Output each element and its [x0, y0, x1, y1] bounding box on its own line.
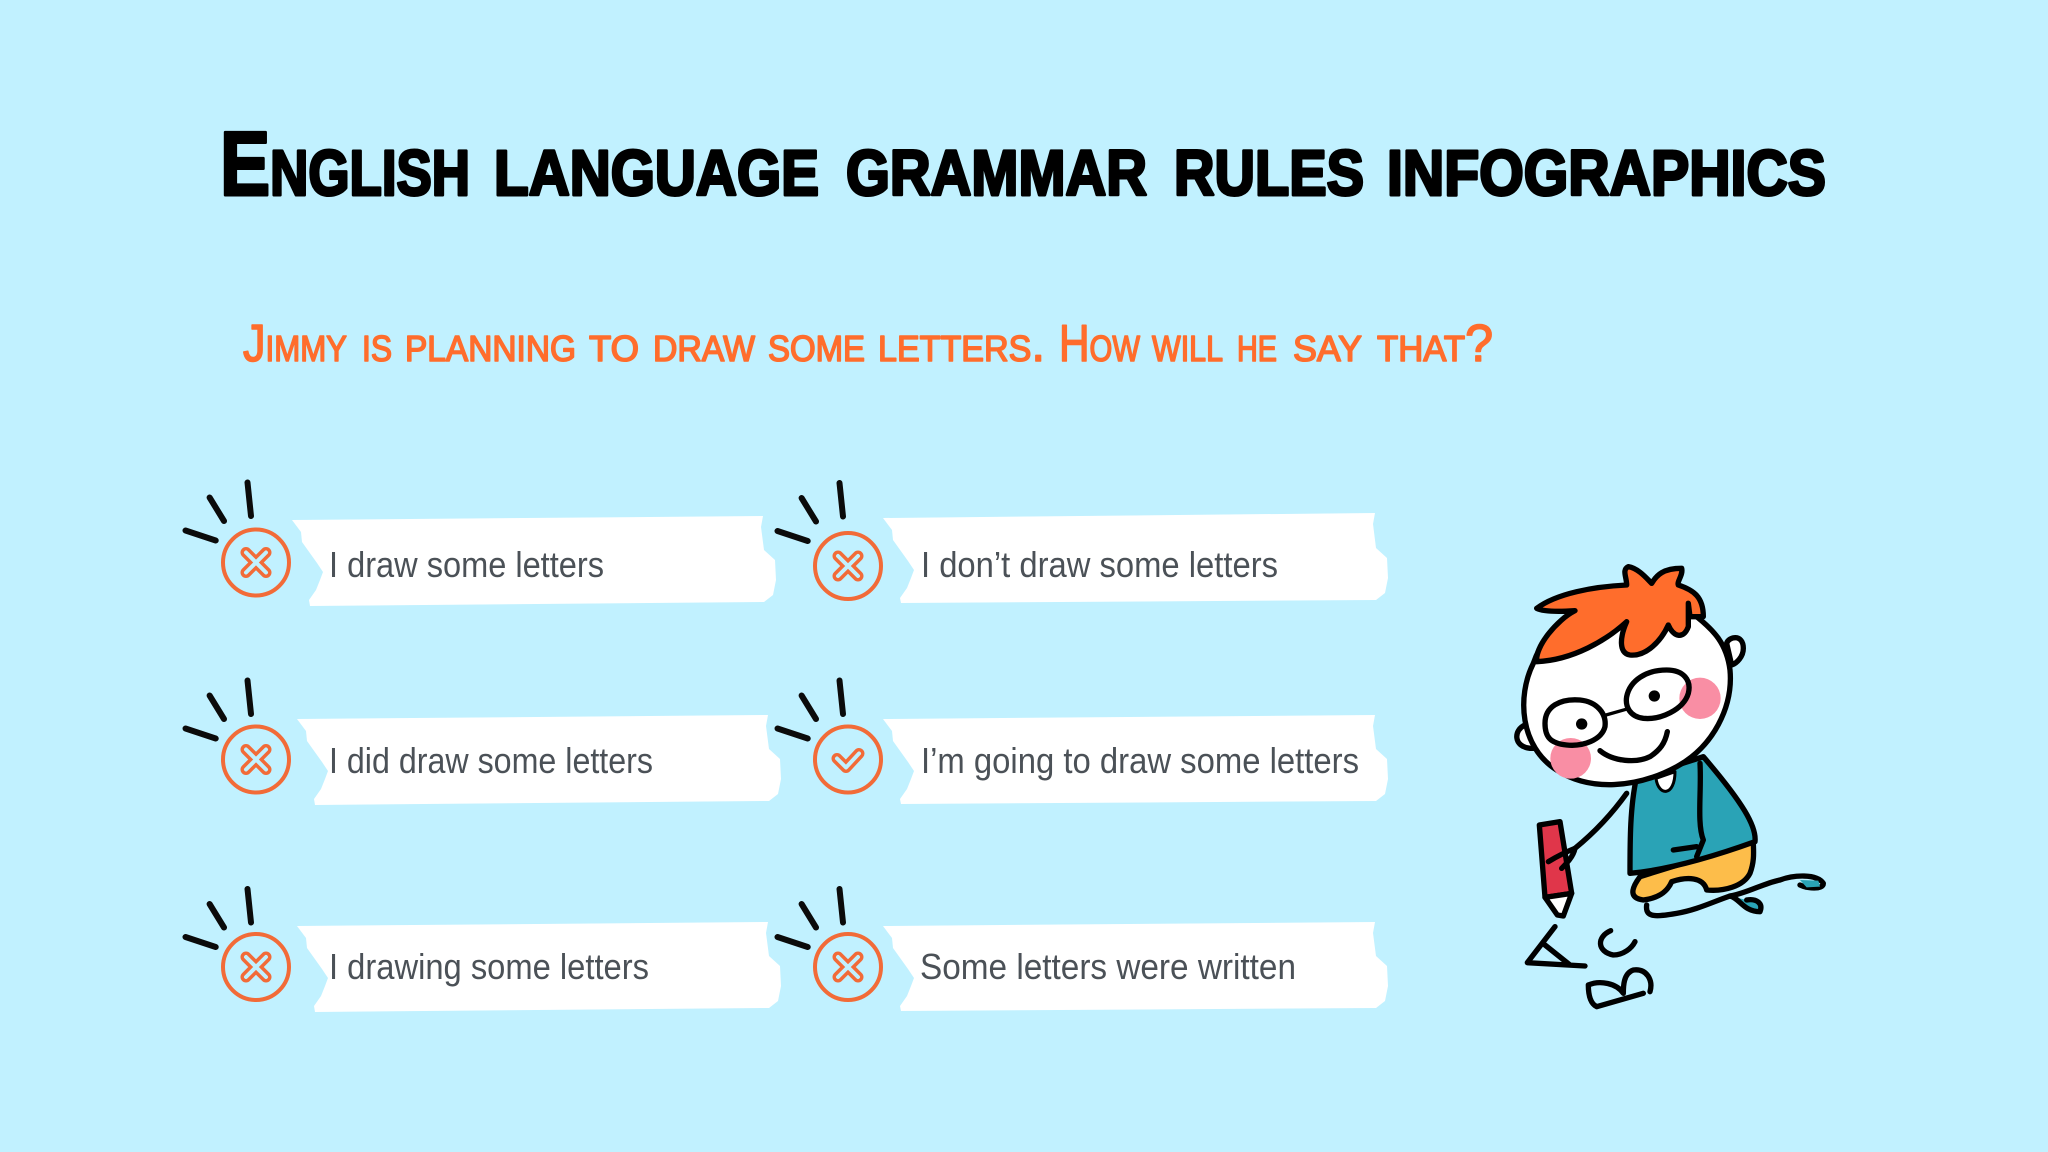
- option: I'm going to draw some letters (correct): [778, 680, 1388, 804]
- question subheading: Jimmy: [243, 315, 347, 373]
- boy's collar: [1656, 772, 1675, 791]
- option text: I’m going to draw some letters: [921, 740, 1359, 781]
- option: I draw some letters (wrong): [186, 482, 776, 606]
- question subheading: How: [1059, 315, 1140, 373]
- title: rules: [1174, 114, 1364, 215]
- smile: [1600, 732, 1667, 761]
- option text: I don’t draw some letters: [921, 544, 1278, 585]
- option text: I did draw some letters: [329, 740, 653, 781]
- illustration: boy with glasses drawing letters: [1517, 567, 1823, 1007]
- option: I did draw some letters (wrong): [186, 680, 781, 805]
- title: [220, 114, 1826, 215]
- option: Some letters were written (wrong): [778, 889, 1388, 1011]
- ribbon: [883, 513, 1388, 603]
- title: infographics: [1387, 114, 1826, 215]
- option text: I draw some letters: [329, 544, 604, 585]
- boy's sweater: [1630, 757, 1755, 873]
- icon: wrong mark: [186, 680, 289, 792]
- boy's shorts: [1633, 842, 1754, 900]
- question subheading: letters.: [878, 315, 1045, 373]
- boy's legs and feet: [1647, 876, 1823, 916]
- ribbon: [297, 922, 781, 1012]
- ears: [1517, 638, 1743, 748]
- question subheading: that?: [1377, 315, 1493, 373]
- option text: I drawing some letters: [329, 946, 649, 987]
- boy's arm: [1575, 793, 1627, 848]
- question subheading: some: [768, 315, 865, 373]
- icon: wrong mark: [186, 889, 289, 1000]
- icon: wrong mark: [186, 482, 289, 596]
- option: I don't draw some letters (wrong): [778, 483, 1388, 603]
- question subheading: will: [1152, 315, 1223, 373]
- ribbon: [883, 715, 1388, 804]
- title: language: [494, 114, 819, 215]
- title: English: [220, 114, 470, 215]
- question subheading: to: [589, 315, 639, 373]
- red pencil: [1539, 822, 1575, 916]
- drawn letters A B C: [1527, 927, 1651, 1007]
- icon: correct mark: [778, 680, 881, 792]
- icon: wrong mark: [778, 483, 881, 599]
- question subheading: planning: [405, 315, 576, 373]
- option: I drawing some letters (wrong): [186, 889, 781, 1012]
- option text: Some letters were written: [920, 946, 1296, 987]
- ribbon: [292, 516, 776, 606]
- title: grammar: [846, 114, 1147, 215]
- question subheading: is: [362, 315, 392, 373]
- question subheading: draw: [653, 315, 755, 373]
- cheeks: [1550, 678, 1721, 779]
- ribbon: [297, 715, 781, 805]
- hair: [1537, 567, 1703, 662]
- icon: wrong mark: [778, 889, 881, 1000]
- glasses: [1545, 670, 1689, 745]
- head: [1524, 597, 1730, 785]
- question subheading: [243, 315, 1493, 373]
- question subheading: he: [1237, 315, 1277, 373]
- ribbon: [883, 922, 1388, 1011]
- question subheading: say: [1293, 315, 1362, 373]
